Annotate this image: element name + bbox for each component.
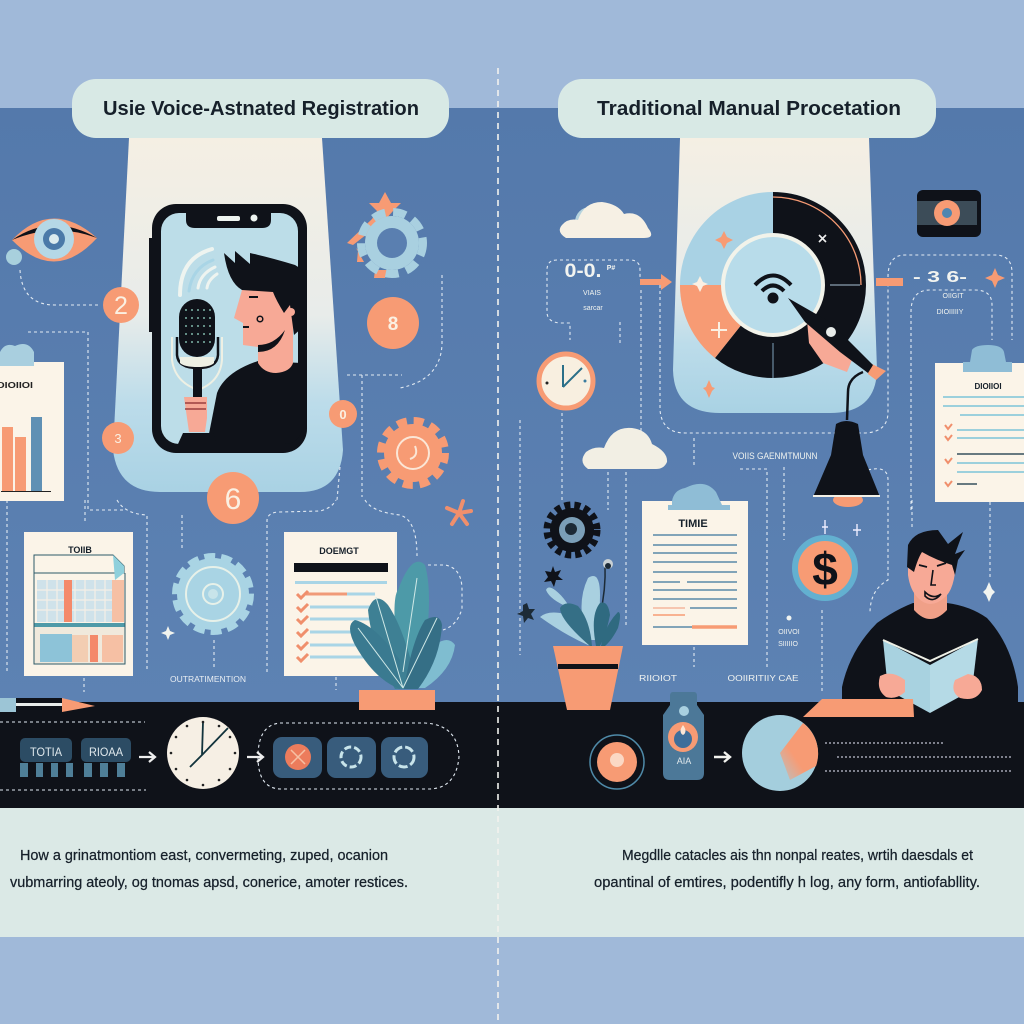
person reading (842, 530, 1018, 713)
number badge 2 (103, 287, 139, 323)
icon: phone with person at microphone (149, 204, 307, 453)
caption left: How a grinatmontiom east, convermeting, zuped, ocanion (20, 847, 388, 864)
icon: desk paper (803, 699, 914, 717)
icon: dollar coin: $ (812, 543, 838, 595)
left bottom band items (20, 717, 428, 789)
dollar label: SIIIIIO (778, 641, 798, 648)
caption left (10, 847, 408, 891)
label: compatibility: OOIIRITIIY CAE (728, 674, 798, 683)
icon: peach gear (381, 421, 445, 485)
person (207, 251, 303, 444)
bottom black band (0, 702, 1024, 808)
annotation left of dial: sarcar (583, 305, 603, 312)
icon: bottle (663, 692, 704, 780)
arrow to dial (640, 274, 672, 290)
arrow from dial right (876, 278, 903, 286)
heading left: Usie Voice-Astnated Registration (103, 98, 419, 120)
dollar label (778, 616, 800, 648)
annotation left of dial: P# (607, 265, 615, 272)
icon: eye (6, 218, 97, 265)
connectors right (520, 255, 1012, 771)
panel: right dial spotlight (673, 138, 877, 413)
caption right: Megdlle catacles ais thn nonpal reates, wrtih daesdals et (622, 847, 974, 864)
number badge 6 (207, 472, 259, 524)
heading right (558, 79, 936, 138)
number badge 3 (102, 422, 134, 454)
number badge 6: 6 (225, 483, 241, 516)
table grid (34, 555, 125, 664)
open book (883, 639, 978, 713)
chart card left: bar chart (0, 344, 64, 501)
timeline tags: TOTIA (30, 745, 62, 759)
caption left: vubmarring ateoly, og tnomas apsd, conerice, amoter restices. (10, 874, 408, 891)
bar chart (1, 417, 51, 492)
icon: peach button (590, 735, 644, 789)
checklist card: DOEMGT (319, 546, 359, 556)
panel: left phone spotlight (113, 138, 343, 492)
label: voice: VOIIS GAENMTMUNN (732, 451, 818, 461)
heading right: Traditional Manual Procetation (597, 98, 901, 120)
background top band (0, 0, 1024, 110)
label under gear: OUTRATIMENTION (170, 675, 246, 684)
checklist card right: DIOIIOI (974, 382, 1002, 391)
annotation left of dial: VIAIS (583, 290, 601, 297)
icon: sound waves (180, 249, 217, 295)
connector lines left (0, 270, 462, 790)
icon: clock (167, 717, 239, 789)
timeline tags (20, 738, 131, 777)
annotation right of dial: - 3 6- (913, 269, 967, 286)
icon: bottle: AIA (677, 756, 691, 766)
annotation left of dial (564, 261, 615, 312)
caption right (594, 847, 980, 891)
sparkle right (983, 582, 995, 602)
number badge 0 (329, 400, 357, 428)
icon: gear with star (347, 192, 423, 278)
icon: hand with pen (788, 298, 886, 380)
background main field (0, 108, 1024, 704)
chart: pie (742, 715, 818, 791)
icon: peach asterisk (447, 501, 471, 524)
icon: dollar coin (795, 538, 855, 598)
number badge 8 (367, 297, 419, 349)
annotation left of dial: 0-0. (564, 261, 602, 282)
sparkle (161, 626, 175, 640)
arrow (714, 752, 730, 762)
arrow (247, 752, 263, 762)
number badge 2: 2 (114, 292, 128, 320)
icon: gear light blue (175, 556, 251, 632)
checklist card (284, 532, 397, 676)
number badge 8: 8 (388, 314, 398, 335)
timeline tags: RIOAA (89, 745, 123, 759)
icon tiles (273, 737, 428, 778)
caption right: opantinal of emtires, podentifly h log, any form, antiofabllity. (594, 874, 980, 891)
table card: TOIIB (68, 545, 92, 555)
caption background panel (0, 808, 1024, 937)
icon: plant right (540, 559, 623, 710)
dollar label: OIIVOI (778, 629, 800, 636)
table card (24, 532, 133, 676)
icon: cloud 1 (560, 202, 651, 238)
icon: cloud 2 (582, 428, 667, 469)
annotation right of dial: DIOIIIIIY (937, 309, 964, 316)
document card TIMIE: TIMIE (678, 518, 708, 530)
bottom band (0, 937, 1024, 1024)
icon: black gear (517, 505, 597, 623)
icon: camera (917, 190, 981, 237)
annotation right of dial: OIIGIT (942, 293, 964, 300)
checklist card right (935, 345, 1024, 502)
icon: clock small (539, 354, 593, 408)
chart: dial (680, 192, 886, 398)
icon: plant left (350, 562, 455, 710)
heading left (72, 79, 449, 138)
icon: wifi (755, 276, 791, 302)
sparkles near coin (822, 520, 861, 536)
icon: pencil (0, 698, 95, 712)
icon: desk lamp (813, 372, 880, 507)
document card TIMIE (642, 484, 748, 645)
number badge 0: 0 (339, 407, 347, 422)
icon: microphone (172, 299, 222, 444)
number badge 3: 3 (114, 431, 122, 446)
label: report: RIIOIOT (639, 674, 677, 683)
arrow (139, 752, 155, 762)
annotation right of dial (913, 268, 1005, 316)
